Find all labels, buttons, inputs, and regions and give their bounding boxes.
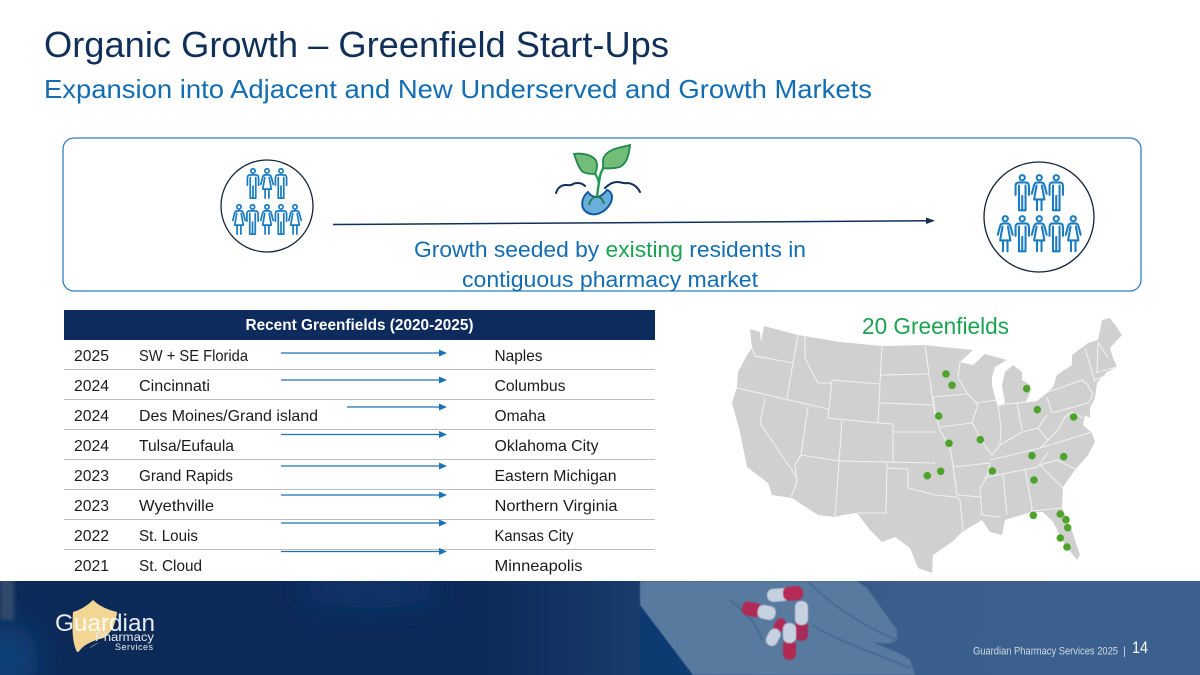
table rows: Northern Virginia	[494, 498, 618, 515]
icon: seedling sprouting from seed	[556, 145, 640, 214]
map: greenfield markers	[924, 370, 1077, 551]
icon: large population circle	[984, 162, 1094, 272]
footer background shading	[0, 581, 428, 675]
table rows: Des Moines/Grand island	[139, 408, 318, 425]
title: Organic Growth – Greenfield Start-Ups	[44, 24, 669, 65]
table: recent greenfields	[64, 310, 655, 575]
table rows: St. Cloud	[139, 558, 202, 575]
table rows: Kansas City	[494, 528, 574, 545]
logo: Guardian Pharmacy Services: Guardian	[55, 610, 155, 637]
table rows: Cincinnati	[139, 378, 210, 395]
table rows: Naples	[494, 348, 542, 365]
footer text and page number: Guardian Pharmacy Services 2025	[973, 646, 1118, 658]
capsules	[741, 586, 808, 660]
table rows: 2024	[74, 408, 109, 425]
table rows: St. Louis	[139, 528, 198, 545]
map: state borders	[737, 335, 1117, 530]
panel: growth concept	[63, 138, 1141, 292]
table rows: 2025	[74, 348, 109, 365]
table rows: Tulsa/Eufaula	[139, 438, 234, 455]
table rows: Wyethville	[139, 498, 214, 515]
table rows: SW + SE Florida	[139, 348, 248, 365]
photo: hand holding capsules	[640, 581, 915, 675]
footer text and page number: |	[1123, 646, 1126, 658]
text: growth caption: Growth seeded by existing residents in	[414, 237, 806, 262]
table rows: Columbus	[494, 378, 566, 395]
table rows: 2024	[74, 378, 109, 395]
table rows: Omaha	[494, 408, 546, 425]
text: growth caption: contiguous pharmacy market	[462, 267, 758, 292]
arrows: market expansion	[281, 350, 447, 555]
heading: 20 greenfields: 20 Greenfields	[862, 313, 1009, 339]
footer text and page number: 14	[1132, 638, 1148, 657]
icon: small population circle	[221, 160, 313, 252]
table header: Recent Greenfields (2020-2025)	[246, 317, 474, 334]
table rows: 2023	[74, 468, 109, 485]
logo: Guardian Pharmacy Services: Services	[115, 642, 154, 652]
logo: Guardian Pharmacy Services: Pharmacy	[95, 632, 154, 644]
table rows: Eastern Michigan	[494, 468, 616, 485]
map: US greenfield locations	[732, 318, 1122, 573]
table header	[64, 310, 655, 340]
table rows: Grand Rapids	[139, 468, 233, 485]
table rows: Minneapolis	[494, 558, 582, 575]
table rows: 2021	[74, 558, 109, 575]
table rows	[74, 348, 618, 575]
table rows: 2023	[74, 498, 109, 515]
table rows: 2022	[74, 528, 109, 545]
footer text and page number	[974, 642, 1148, 657]
footer band	[0, 572, 1200, 675]
table rows: Oklahoma City	[494, 438, 598, 455]
logo: Guardian Pharmacy Services	[55, 600, 155, 656]
arrow: growth direction	[333, 218, 935, 224]
map: state shapes	[732, 318, 1122, 573]
text: growth caption	[414, 237, 806, 292]
subtitle: Expansion into Adjacent and New Underserved and Growth Markets	[44, 74, 872, 104]
table rows: 2024	[74, 438, 109, 455]
